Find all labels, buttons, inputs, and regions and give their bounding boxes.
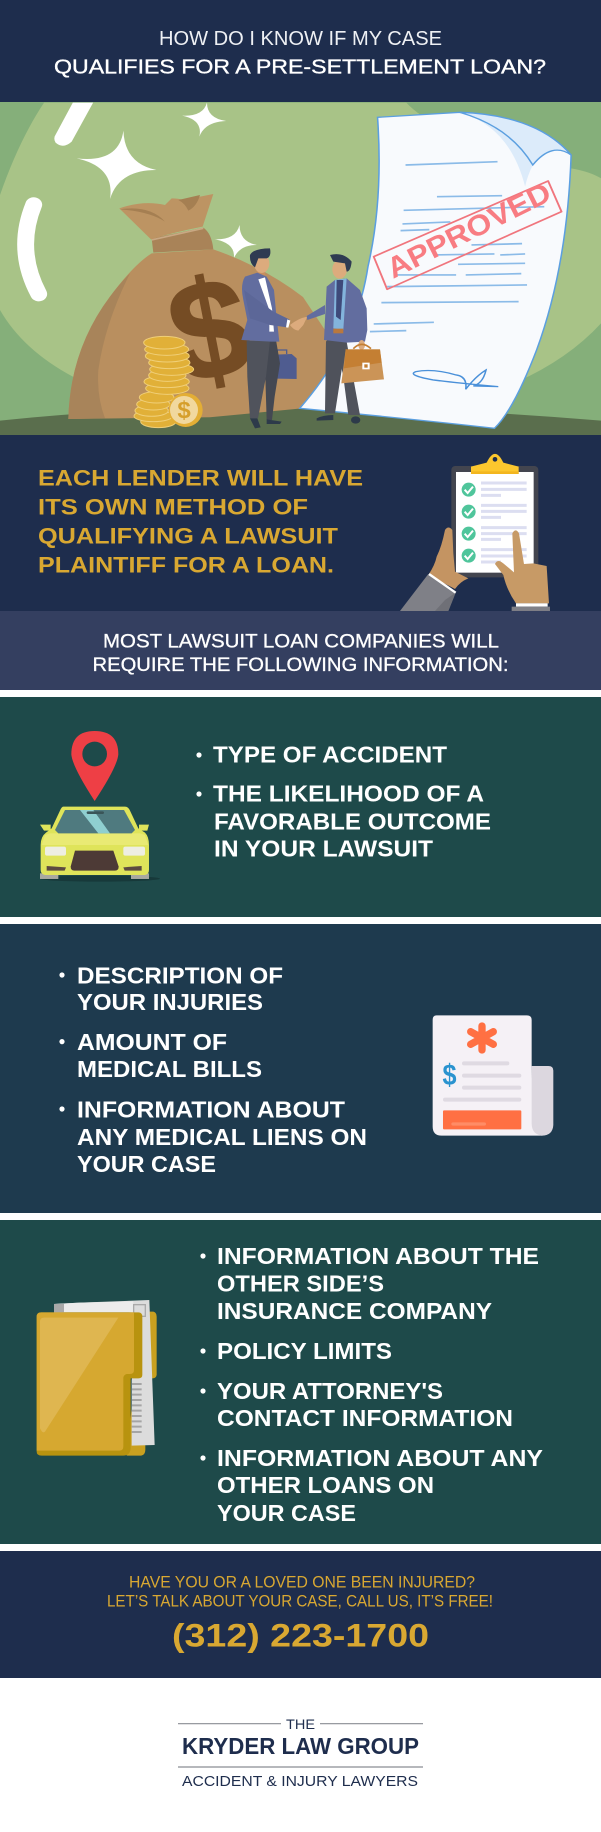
panel: lender intro: [0, 435, 601, 611]
bullet list: injuries: DESCRIPTION OF: [77, 962, 283, 988]
icon: folder with papers: [37, 1300, 157, 1456]
logo: ACCIDENT & INJURY LAWYERS: [182, 1774, 418, 1790]
panel: insurance and contacts: [0, 1220, 601, 1544]
bullet list: injuries: INFORMATION ABOUT: [77, 1096, 345, 1122]
bullet list: injuries: YOUR INJURIES: [77, 989, 263, 1015]
title banner: [0, 0, 601, 102]
band text: [92, 632, 508, 676]
phone number: (312) 223-1700: [172, 1618, 429, 1654]
bullet list: injuries: ANY MEDICAL LIENS ON: [77, 1124, 367, 1150]
bullet list: insurance: OTHER LOANS ON: [217, 1472, 434, 1498]
icon: clipboard checklist with hands: [400, 454, 550, 611]
dollar sign on bag: $: [156, 245, 262, 414]
bullet list: accident: FAVORABLE OUTCOME: [214, 808, 491, 834]
bullet list: insurance: OTHER SIDE’S: [217, 1270, 384, 1296]
sparkles: [77, 103, 257, 258]
logo: KRYDER LAW GROUP: [182, 1733, 419, 1759]
icon: dollar sign on bill: $: [442, 1059, 457, 1092]
bullet list: accident: THE LIKELIHOOD OF A: [213, 781, 484, 807]
bullet list: injuries: YOUR CASE: [77, 1151, 216, 1177]
icon: car with location pin: [40, 731, 160, 882]
band text: REQUIRE THE FOLLOWING INFORMATION:: [92, 655, 508, 676]
lender statement text: ITS OWN METHOD OF: [38, 495, 308, 520]
approved document: [300, 112, 571, 428]
bullet list: insurance: INFORMATION ABOUT ANY: [217, 1445, 543, 1471]
bullet list: injuries: MEDICAL BILLS: [77, 1056, 262, 1082]
call to action text: [107, 1573, 493, 1611]
ground: [0, 407, 601, 435]
bullet list: accident: IN YOUR LAWSUIT: [214, 836, 433, 862]
coin dollar: $: [177, 397, 191, 424]
band text: MOST LAWSUIT LOAN COMPANIES WILL: [103, 632, 499, 653]
bullet list: insurance: POLICY LIMITS: [217, 1338, 392, 1364]
lender statement text: PLAINTIFF FOR A LOAN.: [38, 553, 334, 578]
bullet list: injuries: AMOUNT OF: [77, 1029, 227, 1055]
bullet list: accident: TYPE OF ACCIDENT: [213, 742, 447, 768]
bullet list: insurance: INFORMATION ABOUT THE: [217, 1243, 539, 1269]
panel: injuries and bills: [0, 924, 601, 1213]
call to action text: LET’S TALK ABOUT YOUR CASE, CALL US, IT’S FREE!: [107, 1592, 493, 1611]
businessmen shaking hands: [241, 248, 384, 428]
call to action text: HAVE YOU OR A LOVED ONE BEEN INJURED?: [129, 1573, 475, 1592]
approved stamp text: APPROVED: [382, 177, 556, 285]
white arc left: [26, 205, 39, 294]
icon: medical bill: [433, 1015, 553, 1136]
bullet list: injuries: [59, 962, 367, 1177]
bullet list: accident: [196, 742, 491, 862]
money bag: [68, 194, 337, 419]
panel: requirement intro band: [0, 611, 601, 690]
panel: accident: [0, 697, 601, 917]
bullet list: insurance: YOUR ATTORNEY'S: [217, 1378, 443, 1404]
background blob: [0, 103, 601, 417]
lender statement text: [38, 466, 363, 578]
white dash top: [54, 103, 93, 146]
call to action panel: [0, 1551, 601, 1678]
bullet list: insurance: [200, 1243, 543, 1526]
bullet list: insurance: INSURANCE COMPANY: [217, 1298, 492, 1324]
coin stack: [134, 336, 203, 428]
title line 1: HOW DO I KNOW IF MY CASE: [159, 28, 442, 50]
hero illustration: [0, 102, 601, 435]
logo: [178, 1716, 423, 1790]
bullet list: insurance: CONTACT INFORMATION: [217, 1405, 513, 1431]
title line 2: QUALIFIES FOR A PRE-SETTLEMENT LOAN?: [54, 56, 546, 78]
lender statement text: QUALIFYING A LAWSUIT: [38, 524, 338, 549]
bullet list: insurance: YOUR CASE: [217, 1500, 356, 1526]
logo: THE: [286, 1716, 315, 1732]
lender statement text: EACH LENDER WILL HAVE: [38, 466, 363, 491]
